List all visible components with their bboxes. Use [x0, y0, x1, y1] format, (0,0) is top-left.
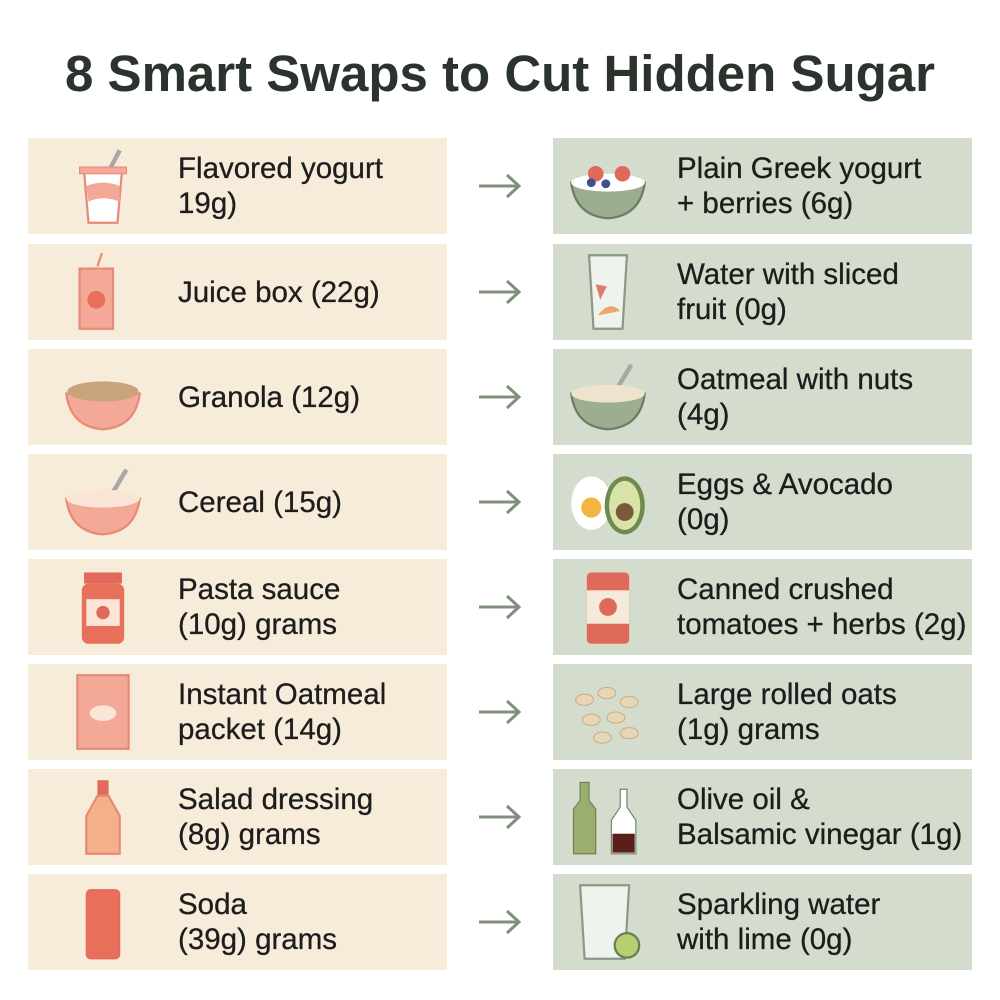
panel: sparkling water [553, 874, 972, 970]
icon: oats [575, 686, 639, 744]
arrow [479, 174, 522, 198]
icon: bottles [572, 782, 636, 854]
text [677, 678, 897, 746]
title: 8 Smart Swaps to Cut Hidden Sugar [65, 45, 935, 102]
text [677, 363, 913, 431]
text: 19g) [178, 187, 237, 220]
text: Olive oil & [677, 783, 810, 816]
panel: water with fruit [553, 244, 972, 340]
text: Plain Greek yogurt [677, 152, 921, 185]
panel: soda [28, 874, 447, 970]
icon: glass with lime [569, 883, 647, 961]
text [178, 874, 337, 970]
panel: pasta sauce [28, 559, 447, 655]
text [178, 573, 340, 641]
row 6 [28, 664, 972, 760]
text [178, 152, 383, 220]
text [677, 874, 880, 970]
text: Water with sliced [677, 258, 899, 291]
text: (8g) grams [178, 818, 321, 851]
text: (4g) [677, 398, 729, 431]
row 7 [28, 769, 972, 865]
text: Balsamic vinegar (1g) [677, 818, 962, 851]
text [677, 258, 899, 326]
panel: salad dressing [28, 769, 447, 865]
text: Sparkling water [677, 888, 880, 921]
panel: juice box [28, 244, 447, 340]
arrow [479, 490, 522, 514]
row 1 [28, 138, 972, 234]
text [677, 468, 893, 536]
arrow [479, 280, 522, 304]
text [178, 783, 373, 851]
panel: oatmeal [553, 349, 972, 445]
icon: can [586, 572, 630, 644]
text: Large rolled oats [677, 678, 897, 711]
panel: greek yogurt [553, 138, 972, 234]
text: (10g) grams [178, 608, 337, 641]
text: Oatmeal with nuts [677, 363, 913, 396]
icon: jar [82, 572, 124, 644]
text: Eggs & Avocado [677, 468, 893, 501]
icon: dressing bottle [85, 780, 121, 855]
panel: granola [28, 349, 447, 445]
icon: yogurt cup [79, 149, 127, 224]
row 2 [28, 244, 972, 340]
text: Granola (12g) [178, 380, 360, 414]
panel: eggs avocado [553, 454, 972, 550]
text: (1g) grams [677, 713, 820, 746]
panel: cereal [28, 454, 447, 550]
arrow [479, 385, 522, 409]
text: + berries (6g) [677, 187, 853, 220]
icon: cereal bowl [65, 468, 141, 536]
text [677, 152, 922, 220]
row 5 [28, 559, 972, 655]
panel: rolled oats [553, 664, 972, 760]
panel: instant oatmeal [28, 664, 447, 760]
text: Instant Oatmeal [178, 678, 386, 711]
text: Flavored yogurt [178, 152, 383, 185]
text: Salad dressing [178, 783, 373, 816]
arrow [479, 805, 522, 829]
text: (39g) grams [178, 923, 337, 956]
text [178, 678, 386, 746]
text: tomatoes + herbs (2g) [677, 608, 966, 641]
row 3 [28, 349, 972, 445]
row 8 [28, 874, 972, 970]
text: Juice box (22g) [178, 276, 380, 308]
row 4 [28, 454, 972, 550]
text: with lime (0g) [677, 923, 852, 956]
text: Pasta sauce [178, 573, 340, 606]
text: packet (14g) [178, 713, 342, 746]
text [677, 783, 962, 851]
text: Canned crushed [677, 573, 893, 606]
text [677, 573, 966, 641]
text: (0g) [677, 503, 729, 536]
panel: olive oil [553, 769, 972, 865]
icon: glass [588, 254, 628, 330]
icon: juice box [78, 253, 114, 330]
arrow [479, 700, 522, 724]
icon: can [64, 883, 142, 961]
icon: egg and avocado [571, 476, 645, 534]
icon: packet [76, 674, 130, 750]
panel: crushed tomatoes [553, 559, 972, 655]
text: Soda [178, 888, 247, 921]
icon: oatmeal bowl [570, 364, 646, 430]
text: Cereal (15g) [178, 486, 342, 518]
icon: granola bowl [65, 381, 141, 430]
arrow [479, 595, 522, 619]
text: fruit (0g) [677, 293, 787, 326]
panel: flavored yogurt [28, 138, 447, 234]
icon: bowl [570, 166, 646, 220]
arrow [477, 908, 523, 936]
